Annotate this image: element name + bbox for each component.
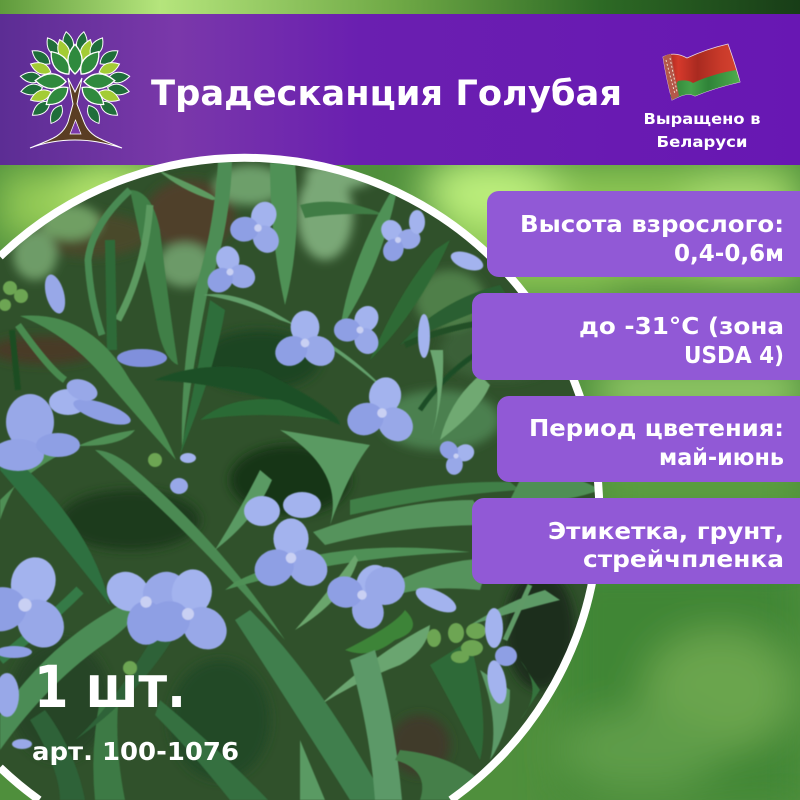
- title: Традесканция Голубая: [151, 74, 622, 114]
- logo crown leaves: [20, 31, 130, 126]
- ground and foliage tones: [0, 161, 590, 780]
- panel: package: стрейчпленка: [583, 545, 784, 573]
- panel: blooming period: [497, 396, 800, 482]
- panel: height: Высота взрослого:: [520, 210, 784, 238]
- caption: grown in Belarus: Выращено в: [644, 110, 761, 128]
- caption: grown in Belarus: Беларуси: [656, 133, 748, 151]
- lower blades: [0, 600, 137, 750]
- white circle ring: [0, 158, 599, 800]
- flowers: [0, 191, 517, 749]
- article number: арт. 100-1076: [32, 737, 239, 766]
- leaves: [0, 162, 600, 800]
- upper blades: [158, 170, 216, 200]
- panel: hardiness: USDA 4): [684, 341, 784, 369]
- buds: [0, 281, 486, 675]
- logo: tree: [20, 31, 130, 148]
- panel: height: [487, 191, 800, 277]
- panel: height: 0,4-0,6м: [674, 239, 784, 267]
- panel: package: [472, 498, 800, 584]
- panel: blooming period: Период цветения:: [529, 414, 784, 442]
- panel: hardiness: до -31°С (зона: [579, 312, 784, 340]
- panel: package: Этикетка, грунт,: [548, 517, 784, 545]
- mid blades: [0, 430, 135, 520]
- panel: blooming period: май-июнь: [659, 443, 784, 471]
- caption: grown in Belarus: [644, 110, 761, 151]
- circular plant photo: [0, 150, 610, 800]
- header band: [0, 14, 800, 165]
- quantity: 1 шт.: [34, 653, 186, 721]
- icon: Belarus flag: [663, 44, 740, 100]
- panel: hardiness: [472, 293, 800, 380]
- logo trunk: [30, 78, 122, 148]
